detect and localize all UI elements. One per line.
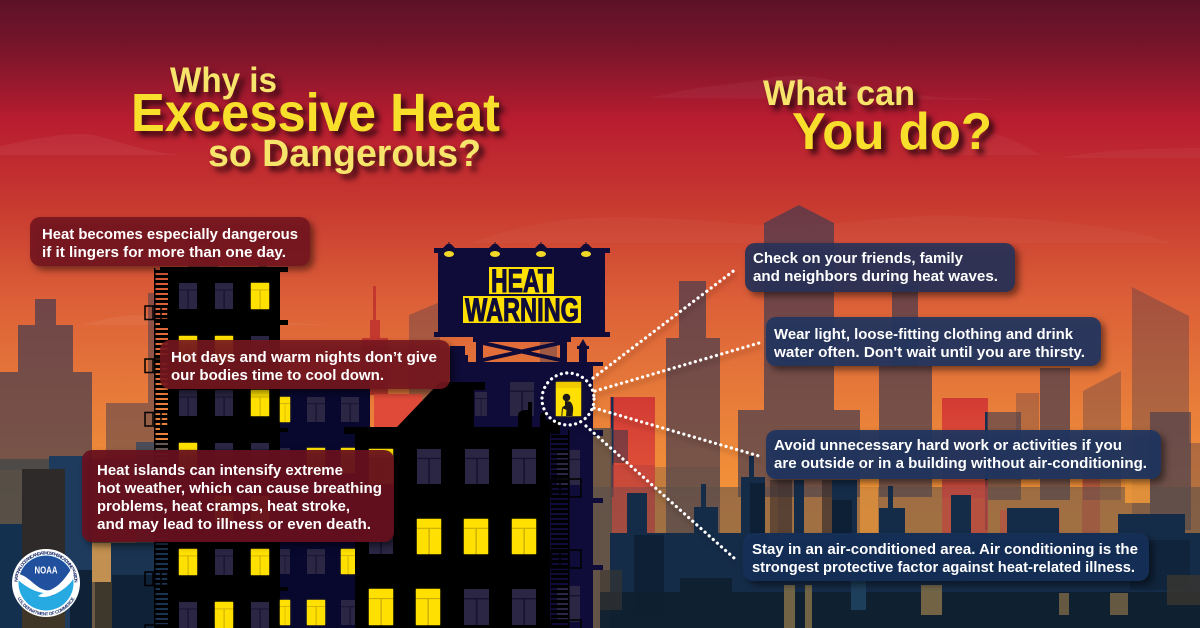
panel: avoid hard work <box>766 430 1161 479</box>
panel: heat islands: problems, heat cramps, heat stroke, <box>97 499 350 515</box>
panel: check on friends <box>745 243 1015 292</box>
dark windows <box>179 283 269 628</box>
panel: warm nights: Hot days and warm nights don’t give <box>171 350 437 366</box>
lit windows <box>179 283 269 628</box>
panel: air-conditioned area <box>743 533 1149 581</box>
panel: avoid hard work: Avoid unnecessary hard work or activities if you <box>774 438 1122 454</box>
back skyline, left <box>0 286 557 628</box>
back skyline, right <box>593 205 1200 628</box>
title: why is excessive heat so dangerous: so Dangerous? <box>208 133 481 175</box>
panel: avoid hard work: are outside or in a building without air-conditioning. <box>774 456 1147 472</box>
NOAA logo: U.S. DEPARTMENT OF COMMERCE <box>18 597 74 616</box>
panel: clothing and water: water often. Don't wait until you are thirsty. <box>773 345 1085 361</box>
panel: air-conditioned area: strongest protective factor against heat-related illness. <box>752 560 1135 576</box>
billboard legs and bracing <box>473 337 571 363</box>
NOAA logo: NOAA <box>34 566 58 576</box>
lit windows, front building <box>369 449 536 625</box>
chimney <box>577 339 589 362</box>
panel: clothing and water <box>766 317 1101 366</box>
panel: check on friends: Check on your friends, family <box>753 251 963 267</box>
title: why is excessive heat so dangerous: Excessive Heat <box>131 83 500 143</box>
panel: heat lingers: if it lingers for more than one day. <box>42 245 286 261</box>
panel: heat islands: Heat islands can intensify extreme <box>97 463 343 479</box>
main navy building with billboard <box>440 337 603 628</box>
billboard <box>434 242 610 337</box>
sign: WARNING: WARNING <box>465 292 579 328</box>
title: what can you do <box>763 74 992 161</box>
NOAA logo <box>12 549 80 617</box>
water tower behind roof <box>188 235 267 268</box>
dotted connector lines <box>542 269 759 558</box>
upper navy windows <box>475 382 580 622</box>
panel: air-conditioned area: Stay in an air-conditioned area. Air conditioning is the <box>752 542 1138 558</box>
panel: warm nights: our bodies time to cool down. <box>171 368 384 384</box>
left fire escape <box>145 268 168 628</box>
panel: heat lingers <box>30 217 310 266</box>
front black building <box>344 382 560 628</box>
panel: clothing and water: Wear light, loose-fitting clothing and drink <box>774 327 1074 343</box>
left lower skyline layer <box>0 442 168 628</box>
person in lit window <box>556 382 581 416</box>
left black building <box>160 235 288 628</box>
foreground skyline, right <box>610 456 1200 628</box>
sign: HEAT: HEAT <box>491 263 552 299</box>
middle navy building <box>280 380 370 628</box>
billboard lamps <box>443 242 592 257</box>
title: what can you do: You do? <box>792 103 992 161</box>
title: why is excessive heat so dangerous <box>131 61 500 175</box>
panel: warm nights <box>160 340 450 389</box>
NOAA logo: NATIONAL OCEANIC AND ATMOSPHERIC ADMINISTRATION <box>14 551 78 582</box>
roof vents <box>518 402 546 427</box>
title: what can you do: What can <box>763 74 915 113</box>
dark windows, front building <box>369 449 536 625</box>
title: why is excessive heat so dangerous: Why is <box>170 61 277 100</box>
right fire escape <box>551 430 581 628</box>
panel: heat islands <box>82 450 394 542</box>
panel: check on friends: and neighbors during heat waves. <box>753 269 998 285</box>
panel: heat islands: hot weather, which can cause breathing <box>97 481 382 497</box>
panel: heat lingers: Heat becomes especially dangerous <box>42 227 298 243</box>
clouds <box>0 76 1200 325</box>
panel: heat islands: and may lead to illness or even death. <box>97 517 371 533</box>
